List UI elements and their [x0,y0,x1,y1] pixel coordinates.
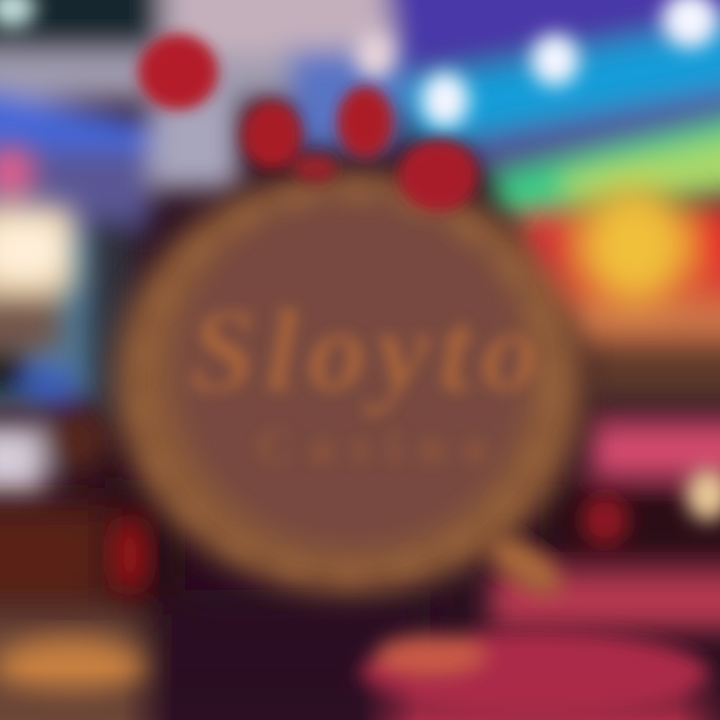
sign title: Sloyto [190,285,540,416]
base strip: smooth bottom edge colours [0,670,720,720]
sign subtitle: Casino [257,420,487,473]
tail: curl at sign lower right [479,525,571,605]
sign rim highlights [140,195,550,575]
sign: round wooden plaque [114,170,586,594]
glow: yellow light right [533,185,720,305]
red accent: lower left [112,515,148,595]
sign face [172,194,532,550]
table: lower dark foreground [0,480,430,720]
ornaments: red berries on sign [138,34,478,211]
lights: white bokeh spots [0,0,718,128]
cake: left blurred dessert [0,146,111,495]
sign rim [114,170,586,594]
plate: lower left orange [0,638,145,698]
dish: lower right red bowl [360,469,720,720]
